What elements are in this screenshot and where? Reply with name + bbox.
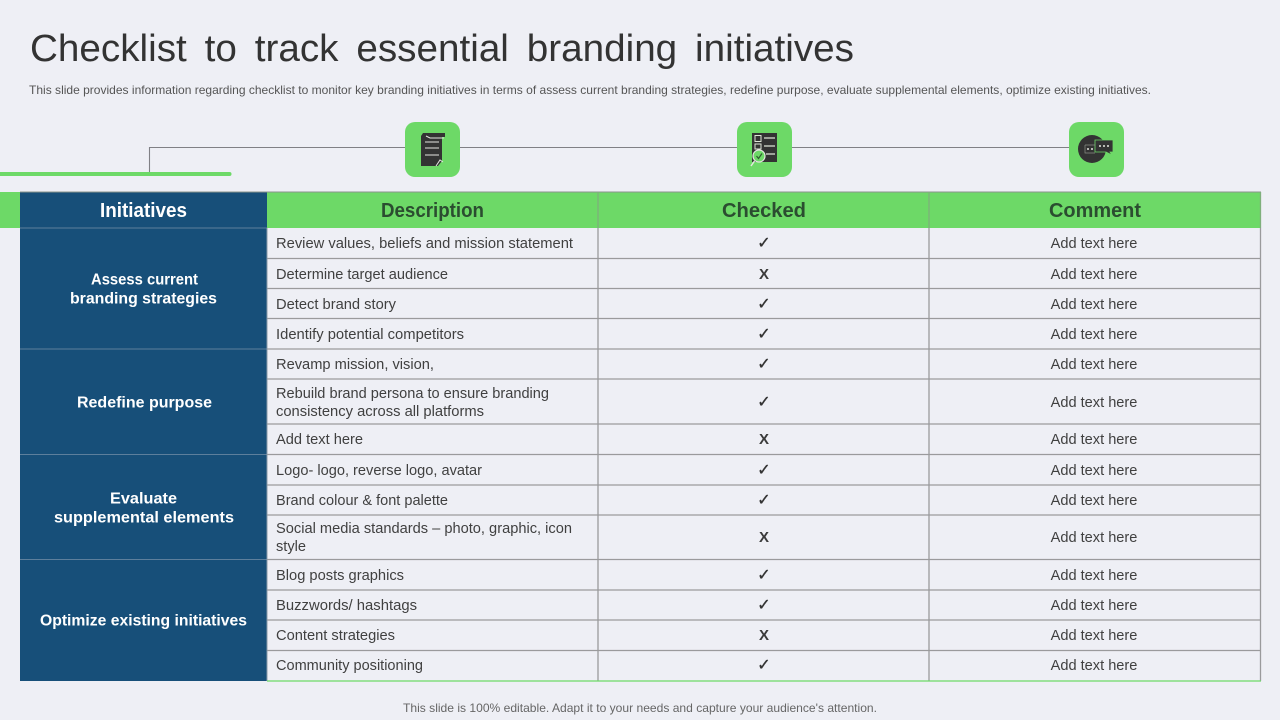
comment column text: Add text here	[1051, 658, 1137, 674]
description column text: Content strategies	[276, 627, 395, 644]
description column text: Add text here	[276, 431, 363, 448]
comment column text: Add text here	[1051, 530, 1137, 546]
comment column text: Add text here	[1051, 628, 1137, 644]
description column text: Brand colour & font palette	[276, 492, 448, 509]
checked column marks: X	[759, 266, 769, 283]
initiatives column: Evaluate	[110, 490, 177, 508]
comment column text: Add text here	[1051, 568, 1137, 584]
checked column marks: X	[759, 529, 769, 546]
footer note: This slide is 100% editable. Adapt it to your needs and capture your audience's attention.	[403, 701, 877, 715]
initiatives column	[20, 192, 267, 681]
initiatives column: Initiatives	[100, 200, 187, 222]
header: description, checked, comment: Checked	[722, 200, 806, 222]
comment column text: Add text here	[1051, 267, 1137, 283]
description column text: style	[276, 538, 306, 555]
initiatives column: Redefine purpose	[77, 394, 212, 412]
icon: document	[405, 122, 460, 177]
title: Checklist to track essential branding initiatives	[30, 28, 854, 70]
icon: checklist	[737, 122, 792, 177]
initiatives column: Assess current	[91, 272, 199, 288]
description column text: Determine target audience	[276, 266, 448, 283]
checked column marks: X	[759, 431, 769, 448]
header: description, checked, comment: Comment	[1049, 200, 1141, 222]
description column text: Review values, beliefs and mission statement	[276, 235, 574, 252]
description column text: Rebuild brand persona to ensure branding	[276, 385, 549, 402]
comment column text	[1051, 236, 1137, 674]
description column text: Buzzwords/ hashtags	[276, 597, 417, 614]
checked column marks: ✓	[757, 595, 771, 614]
checked column marks: ✓	[757, 294, 771, 313]
description column text: Community positioning	[276, 657, 423, 674]
checked column marks: ✓	[757, 655, 771, 674]
comment column text: Add text here	[1051, 432, 1137, 448]
description column text: Social media standards – photo, graphic, icon	[276, 520, 572, 537]
description column text: consistency across all platforms	[276, 403, 484, 420]
comment column text: Add text here	[1051, 395, 1137, 411]
description column text: Blog posts graphics	[276, 567, 404, 584]
header: description, checked, comment: Description	[381, 200, 484, 222]
checked column marks: X	[759, 627, 769, 644]
checked column marks: ✓	[757, 354, 771, 373]
description column text: Logo- logo, reverse logo, avatar	[276, 462, 482, 479]
description column text: Identify potential competitors	[276, 326, 464, 343]
checked column marks: ✓	[757, 460, 771, 479]
comment column text: Add text here	[1051, 357, 1137, 373]
green accent bar	[0, 172, 232, 176]
checked column marks: ✓	[757, 233, 771, 252]
comment column text: Add text here	[1051, 493, 1137, 509]
description column text: Detect brand story	[276, 296, 396, 313]
header: description, checked, comment	[267, 192, 1261, 228]
comment column text: Add text here	[1051, 236, 1137, 252]
description column text: Revamp mission, vision,	[276, 356, 434, 373]
subtitle description: This slide provides information regarding checklist to monitor key branding initiatives in terms of assess current branding strategies, redefine purpose, evaluate supplemental elements, optimize existing initiatives.	[29, 83, 1151, 97]
comment column text: Add text here	[1051, 463, 1137, 479]
initiatives column: supplemental elements	[54, 510, 234, 526]
green header tab	[0, 192, 20, 228]
checked column marks: ✓	[757, 490, 771, 509]
checked column marks: ✓	[757, 324, 771, 343]
initiatives column: Optimize existing initiatives	[40, 612, 247, 630]
comment column text: Add text here	[1051, 598, 1137, 614]
checked column marks: ✓	[757, 392, 771, 411]
icon: speech bubbles	[1069, 122, 1124, 177]
comment column text: Add text here	[1051, 297, 1137, 313]
comment column text: Add text here	[1051, 327, 1137, 343]
connector line	[150, 148, 1070, 173]
description column text	[276, 235, 574, 674]
checked column marks	[757, 233, 771, 674]
table	[20, 192, 1261, 681]
checked column marks: ✓	[757, 565, 771, 584]
initiatives column: branding strategies	[70, 290, 217, 308]
